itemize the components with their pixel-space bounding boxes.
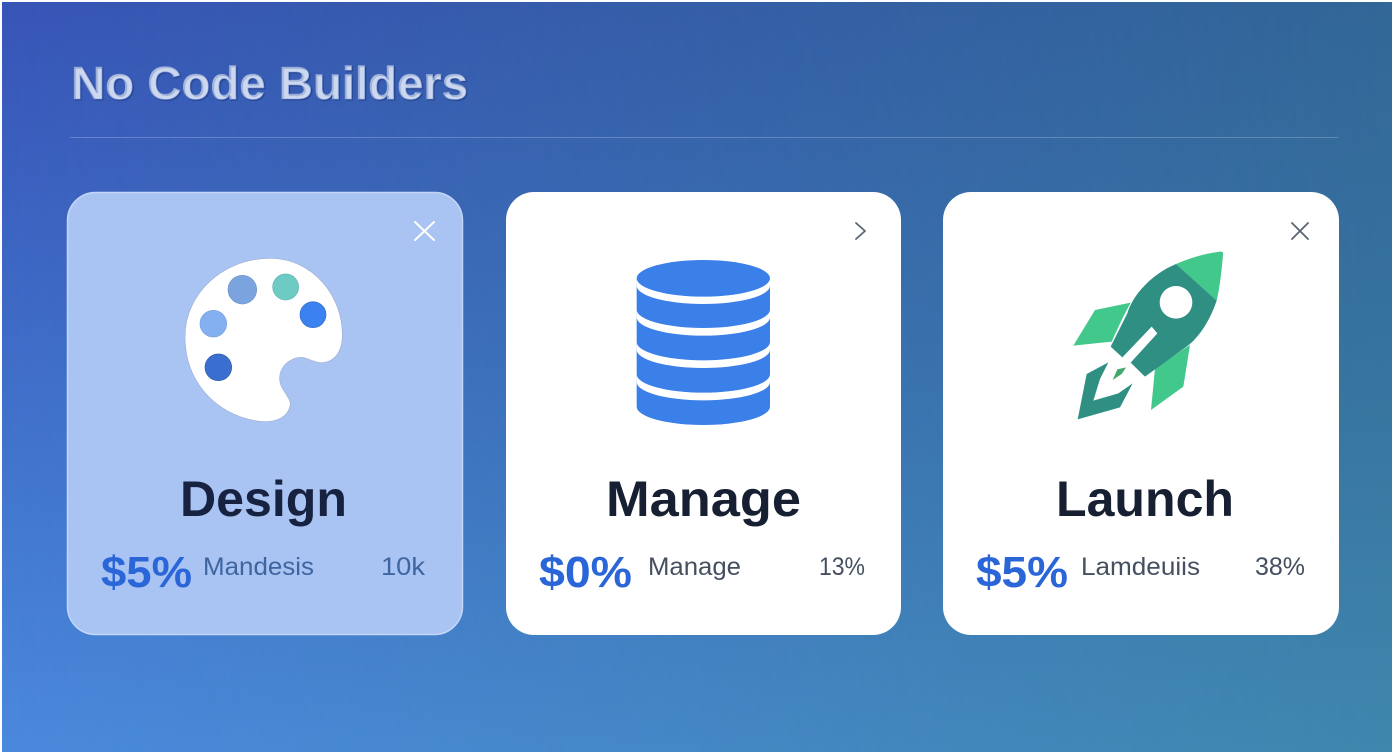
panel: Design card: [68, 192, 462, 634]
label: Lamdeuiis: Lamdeuiis: [1081, 553, 1200, 581]
icon: database cylinder: [637, 260, 770, 425]
stat: $5%: $5%: [101, 548, 192, 597]
title: No Code Builders: [71, 57, 468, 109]
panel: Manage card: [506, 192, 901, 635]
card heading: Launch: Launch: [1056, 471, 1234, 527]
panel: Launch card: [943, 192, 1339, 635]
label: Mandesis: Mandesis: [203, 553, 314, 581]
stat: $5%: $5%: [976, 548, 1068, 597]
card heading: Design: Design: [180, 471, 347, 527]
value: 13%: 13%: [819, 553, 865, 581]
card heading: Manage: Manage: [606, 471, 801, 527]
value: 38%: 38%: [1255, 553, 1305, 581]
icon: close x: [1292, 223, 1308, 239]
stat: $0%: $0%: [539, 548, 632, 597]
icon: paint palette: [185, 258, 342, 422]
icon: chevron right: [856, 223, 865, 239]
icon: rocket: [1073, 252, 1223, 419]
value: 10k: 10k: [381, 553, 426, 581]
icon: close x: [415, 222, 434, 240]
label: Manage: Manage: [648, 553, 741, 581]
